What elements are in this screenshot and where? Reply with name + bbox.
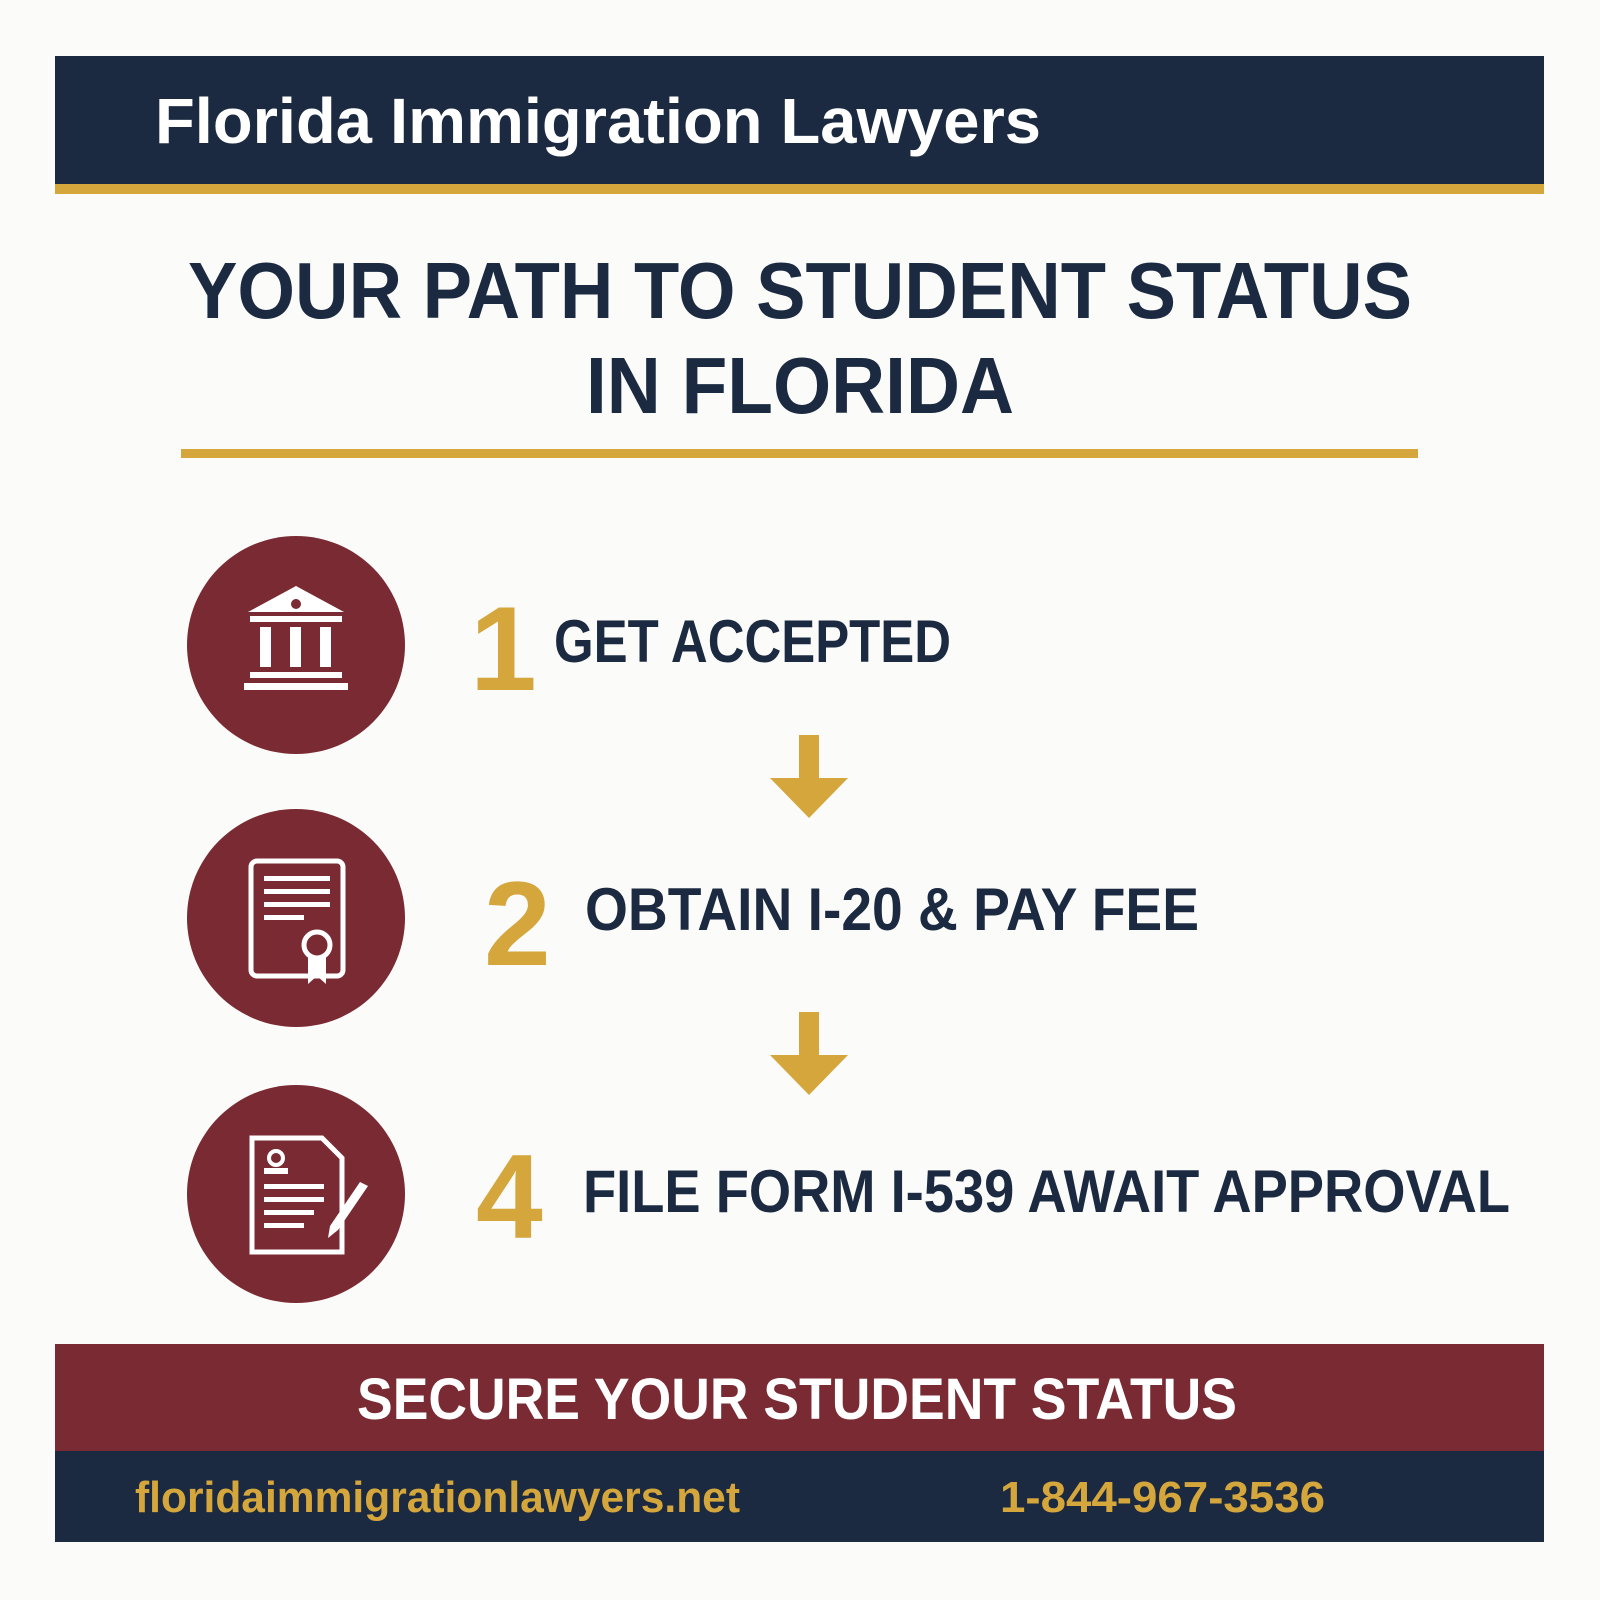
phone: 1-844-967-3536 — [1000, 1473, 1325, 1522]
footer contact bar — [55, 1451, 1544, 1542]
step 1 — [187, 536, 951, 754]
icon: certificate — [187, 809, 405, 1027]
arrow 1 — [770, 735, 848, 818]
number 2: 2 — [484, 857, 551, 991]
main title: YOUR PATH TO STUDENT STATUS — [188, 246, 1412, 335]
step 4 label: FILE FORM I-539 AWAIT APPROVAL — [583, 1158, 1510, 1225]
header bar — [55, 56, 1544, 194]
step 2 label: OBTAIN I-20 & PAY FEE — [585, 876, 1199, 943]
call to action banner: SECURE YOUR STUDENT STATUS — [357, 1367, 1237, 1432]
website: floridaimmigrationlawyers.net — [135, 1473, 740, 1522]
number 4: 4 — [476, 1130, 543, 1264]
call to action banner — [55, 1344, 1544, 1452]
title underline — [181, 449, 1418, 458]
number 1: 1 — [470, 582, 537, 716]
step 4 — [187, 1085, 1510, 1303]
header title: Florida Immigration Lawyers — [155, 85, 1041, 157]
arrow 2 — [770, 1012, 848, 1095]
main title — [188, 246, 1412, 430]
icon: form with pen — [187, 1085, 405, 1303]
step 1 label: GET ACCEPTED — [554, 608, 951, 675]
step 2 — [187, 809, 1199, 1027]
main title: IN FLORIDA — [586, 341, 1014, 430]
icon: university building — [187, 536, 405, 754]
